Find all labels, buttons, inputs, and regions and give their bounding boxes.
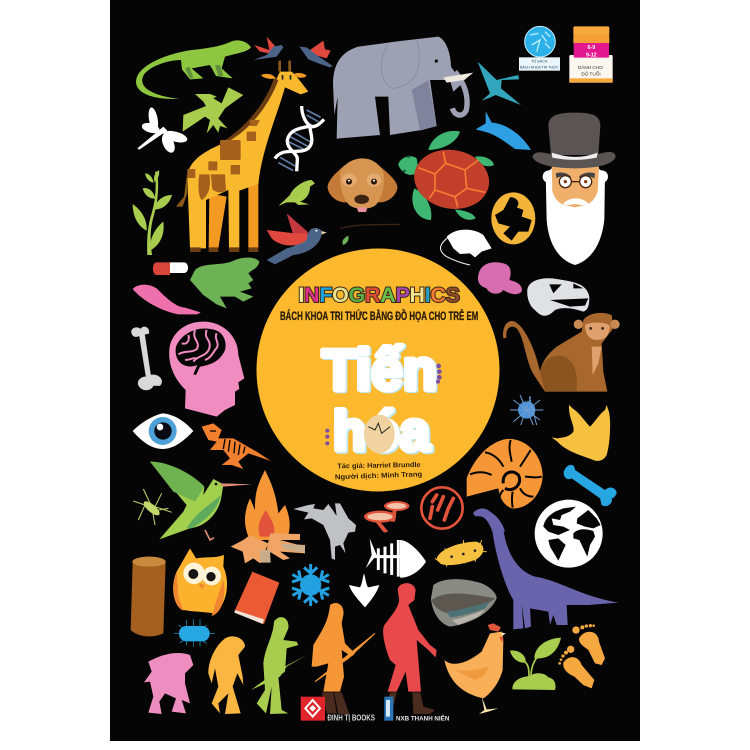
icon: red and blue bird left [253, 37, 283, 60]
icon: human footprints [558, 624, 605, 688]
icon: red book [234, 572, 279, 624]
icon: pink head with brain [169, 322, 244, 417]
author credit: Tác giả: Harriet Brundle [337, 462, 421, 470]
icon: white dragonfly [137, 107, 189, 155]
icon: cracked egg [364, 415, 395, 453]
icon: seedling [510, 638, 561, 690]
main title: Tiến [324, 340, 439, 404]
icon: plant sprig [133, 170, 172, 255]
icon: twig with leaf [340, 224, 400, 245]
main title: hóa [334, 400, 433, 463]
icon: giraffe [176, 61, 308, 252]
decorative dots on letters [325, 364, 442, 445]
icon: eye [133, 413, 193, 449]
main title: Tiến [322, 338, 437, 402]
icon: campfire [231, 470, 305, 563]
icon: green pterosaur [183, 87, 243, 133]
icon: hummingbird [150, 462, 252, 540]
top-left icon zone [133, 37, 400, 264]
icon: monkey [503, 313, 620, 392]
icon: Darwin portrait [532, 113, 616, 265]
icon: globe [535, 500, 603, 568]
bottom-right icon zone [366, 487, 618, 723]
bottom-left icon zone [131, 470, 376, 723]
age range badge: ĐỘ TUỔI [581, 70, 601, 76]
icon: hen [444, 623, 506, 714]
right icon zone [467, 262, 620, 508]
icon: blue bone [564, 465, 617, 506]
icon: dog face [328, 158, 397, 212]
icon: fossil egg [491, 192, 535, 244]
top-right icon zone [333, 26, 616, 265]
evolution: green hominid with stick [251, 617, 307, 714]
icon: white mouse [440, 230, 492, 265]
icon: encyclopedia series logo [519, 26, 560, 71]
evolution: yellow early hominid [208, 636, 245, 714]
icon: green frog [190, 258, 259, 308]
icon: pill capsule [153, 262, 188, 275]
icon: wood log [131, 557, 166, 636]
icon: white bird track [349, 573, 379, 607]
icon: fish skeleton [366, 538, 426, 578]
mid-bottom icon zone [289, 501, 409, 607]
publisher logo: NXB Thanh Nien [384, 697, 450, 723]
icon: blue bacterium [174, 619, 215, 647]
evolution: pink ape [144, 653, 193, 714]
age range badge: 6-9 [587, 45, 595, 51]
colourful series title: INFOGRAPHICS [298, 283, 460, 307]
translator credit: Người dịch: Minh Trang [335, 471, 422, 481]
icon: encyclopedia series logo: TỦ SÁCH [531, 59, 548, 64]
yellow title disc [256, 248, 500, 492]
icon: white bone [131, 327, 162, 390]
icon: mushrooms [364, 501, 409, 533]
publisher logo: Dinh Ti Books [301, 697, 376, 723]
icon: yellow microbe [435, 540, 487, 567]
main title: hóa [333, 399, 431, 462]
age range badge [569, 26, 613, 83]
publisher logo: Dinh Ti Books: ĐINH TỊ BOOKS [327, 714, 376, 723]
icon: elephant [333, 37, 473, 139]
icon: pink pig silhouette [478, 262, 522, 294]
age range badge: DÀNH CHO [578, 64, 603, 70]
icon: blue virus [510, 395, 543, 425]
icon: owl [173, 548, 227, 616]
subtitle: BÁCH KHOA TRI THỨC BẰNG ĐỒ HỌA CHO TRẺ EM [280, 308, 478, 323]
central yellow circle [256, 248, 500, 492]
black cover panel [110, 0, 640, 741]
left icon zone [131, 258, 271, 540]
main title [322, 338, 439, 463]
icon: blue fish [476, 111, 531, 150]
icon: purple brontosaurus [473, 509, 618, 629]
icon: red and blue bird right [299, 41, 333, 67]
icon: turtle [398, 131, 494, 220]
icon: bacteria in petri dish [421, 487, 463, 529]
publisher logo: NXB Thanh Nien: NXB THANH NIÊN [396, 714, 450, 723]
icon: layered rock [431, 579, 497, 627]
icon: encyclopedia series logo: BÁCH KHOA TRI THỨC [520, 64, 559, 69]
icon: green lizard [136, 40, 251, 99]
icon: ant [133, 489, 172, 525]
icon: ammonite fossil [467, 439, 543, 508]
icon: pink fish [133, 285, 201, 314]
icon: small green bird [278, 180, 315, 206]
age range badge: 9-12 [586, 52, 597, 58]
icon: DNA helix [275, 106, 324, 171]
icon: red and blue bird large [267, 213, 327, 264]
icon: teal pterosaur [478, 62, 521, 105]
evolution: red modern human [383, 583, 437, 714]
icon: dinosaur skull [527, 278, 589, 316]
evolution: orange hominid with spear [312, 603, 375, 714]
icon: yellow footprint [552, 405, 610, 461]
icon: grey rabbit [293, 503, 356, 560]
icon: snowflake [289, 564, 332, 606]
icon: dinosaur skeleton orange [202, 423, 271, 469]
